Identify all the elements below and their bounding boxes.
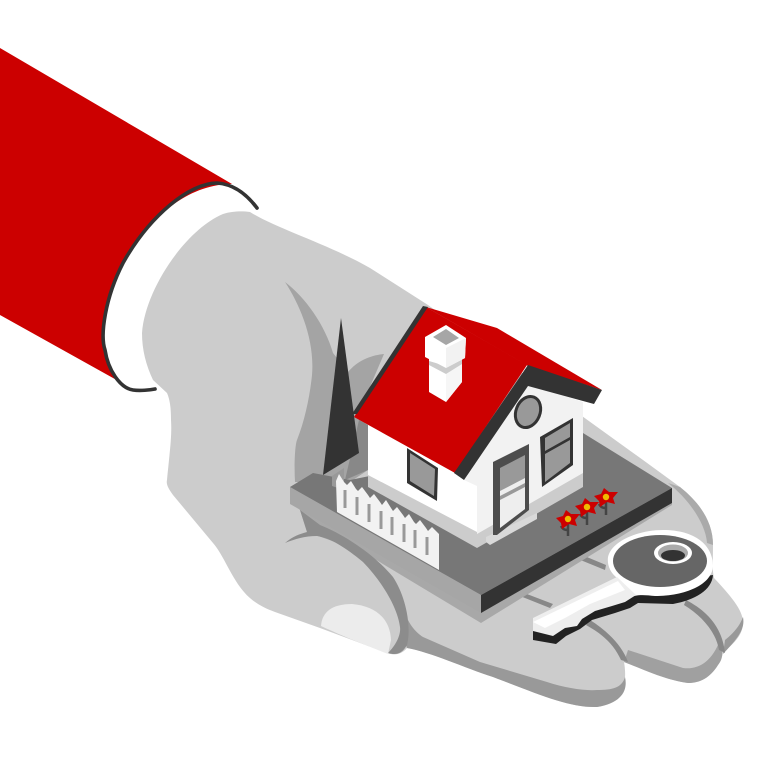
door step (486, 513, 537, 545)
door bar (500, 478, 525, 496)
crease short (519, 591, 553, 608)
key blade highlight (533, 581, 625, 628)
right window (540, 418, 573, 487)
centre (565, 516, 571, 522)
lower palm shade (405, 620, 626, 707)
fence (336, 474, 439, 570)
roof front (354, 307, 527, 473)
key hole ring inner (658, 544, 688, 562)
foundation (368, 472, 583, 548)
gable wall (464, 384, 583, 534)
key blade (533, 577, 636, 636)
flower 3 (594, 488, 618, 507)
chimney stack side (446, 355, 462, 402)
roof left edge (352, 306, 428, 414)
platform under shade (290, 488, 672, 623)
side window pane (410, 453, 435, 496)
chimney (425, 325, 466, 402)
door panel (500, 455, 525, 528)
tree trunk (332, 468, 344, 490)
thumb shadow (285, 510, 409, 654)
centre (603, 494, 609, 500)
shade behind tree darker (345, 420, 368, 480)
key hole ring (654, 542, 692, 564)
thumb crease behind tree (285, 282, 384, 482)
centre (584, 504, 590, 510)
door lower (500, 487, 525, 528)
roof back (426, 307, 602, 390)
platform top (290, 433, 672, 595)
petals (594, 488, 618, 507)
flowers (556, 488, 618, 536)
platform front edge (481, 488, 672, 613)
finger crease right (684, 600, 725, 653)
chimney shade (429, 356, 462, 374)
petals (575, 498, 599, 517)
tree crown (323, 318, 359, 475)
side window (407, 448, 438, 501)
chimney cap side (446, 338, 466, 368)
red sleeve (0, 48, 232, 383)
round window (511, 393, 545, 431)
fence body (336, 474, 439, 570)
thumb nail (321, 604, 391, 654)
fence slots (345, 490, 427, 555)
chimney stack (429, 350, 462, 402)
flower 2 (575, 498, 599, 517)
platform left side (290, 487, 481, 613)
chimney hole (433, 329, 459, 345)
cuff edge (103, 183, 257, 390)
hand (142, 211, 743, 707)
platform (290, 433, 672, 613)
house (352, 306, 602, 548)
key head (608, 530, 713, 598)
door frame (493, 444, 529, 535)
palm and fingers base (142, 211, 743, 707)
right window panes (545, 423, 570, 482)
flower 1 (556, 510, 580, 529)
gable trim (454, 365, 602, 480)
petals (556, 510, 580, 529)
upper finger shade (668, 483, 713, 545)
ring finger shade (624, 640, 722, 683)
chimney cap (425, 325, 466, 368)
little finger shade (723, 617, 743, 654)
crease upper (578, 555, 606, 570)
key (533, 530, 713, 644)
key face (613, 535, 707, 587)
left wall (368, 420, 477, 532)
key shadow (533, 575, 713, 644)
finger crease (586, 620, 628, 662)
key hole (661, 550, 685, 561)
tree (323, 318, 359, 490)
stems (561, 497, 606, 536)
